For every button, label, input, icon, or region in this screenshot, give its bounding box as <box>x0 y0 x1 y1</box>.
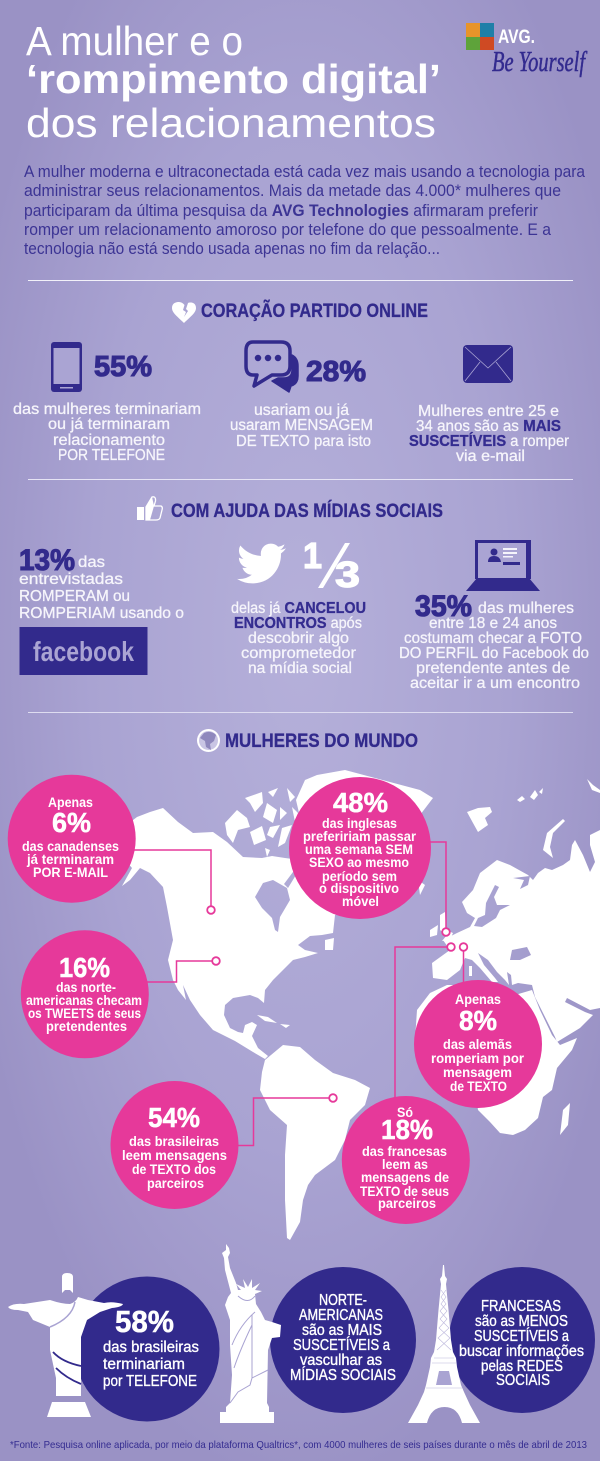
panel: france circle: pelas REDES <box>481 1358 563 1375</box>
panel: france circle: são as MENOS <box>475 1313 568 1330</box>
panel: brazil circle: 58% <box>115 1304 174 1339</box>
text: text message stat: usaram MENSAGEM <box>230 417 373 434</box>
callout: alemãs 8% <box>414 980 542 1108</box>
intro text: tecnologia não está sendo usada apenas no fim da relação... <box>24 239 440 258</box>
text: email stat: 34 anos são as MAIS <box>416 418 561 435</box>
intro text: romper um relacionamento amoroso por telefone do que pessoalmente. E a <box>24 220 551 239</box>
panel: north america circle: são as MAIS <box>302 1322 382 1339</box>
panel: com ajuda das mídias sociais <box>19 497 589 692</box>
title: A mulher e o <box>26 18 243 64</box>
callout: francesas 18%: das francesas <box>362 1144 447 1159</box>
title: dos relacionamentos <box>26 100 436 146</box>
icon: thumbs up <box>137 497 162 520</box>
callout: alemãs 8%: romperiam por <box>431 1051 525 1066</box>
text: twitter stat: descobrir algo <box>248 630 349 647</box>
callout: norte-americanas 16%: 16% <box>59 952 110 983</box>
panel: north america circle: AMERICANAS <box>299 1307 383 1324</box>
callout: inglesas 48%: uma semana SEM <box>305 842 413 857</box>
callout: inglesas 48%: SEXO ao mesmo <box>309 855 409 870</box>
panel: north america circle: MÍDIAS SOCIAIS <box>290 1367 396 1384</box>
callout: inglesas 48%: móvel <box>342 894 379 909</box>
text: facebook profile stat: aceitar ir a um encontro <box>410 675 580 692</box>
world map <box>120 770 600 1240</box>
panel: france circle: SUSCETÍVEIS a <box>474 1328 569 1345</box>
text: text message stat <box>230 402 373 450</box>
text: facebook profile stat: 35% <box>415 590 472 623</box>
callout: brasileiras 54%: de TEXTO dos <box>132 1162 216 1177</box>
text: email stat: Mulheres entre 25 e <box>418 403 559 420</box>
text: twitter stat: comprometedor <box>241 645 357 662</box>
callout: francesas 18% <box>342 1096 470 1224</box>
statue robe folds <box>230 1296 268 1403</box>
text: twitter stat: ENCONTROS após <box>234 615 362 632</box>
callout: canadenses 6%: 6% <box>52 807 91 838</box>
callout: inglesas 48%: das inglesas <box>322 816 397 831</box>
callout: canadenses 6% <box>8 775 136 903</box>
text: twitter stat: delas já CANCELOU <box>231 600 366 617</box>
facebook logo <box>20 627 148 675</box>
text: email stat: via e-mail <box>456 448 525 465</box>
callout: norte-americanas 16%: das norte- <box>56 980 116 995</box>
facebook logo: facebook <box>33 636 134 667</box>
text: twitter stat <box>231 600 366 677</box>
fraction one third: 3 <box>335 554 360 595</box>
title <box>26 18 441 146</box>
callout: inglesas 48%: o dispositivo <box>319 881 399 896</box>
panel: france circle: SOCIAIS <box>496 1372 550 1389</box>
callout: francesas 18%: 18% <box>381 1114 433 1145</box>
text: facebook stat: 13% <box>19 544 75 577</box>
callout: norte-americanas 16%: americanas checam <box>26 993 142 1008</box>
heading: MULHERES DO MUNDO <box>225 731 418 752</box>
text: email stat <box>409 403 570 465</box>
text: facebook profile stat: das mulheres <box>478 600 574 617</box>
heading: CORAÇÃO PARTIDO ONLINE <box>201 300 428 322</box>
panel: france circle: FRANCESAS <box>481 1298 561 1315</box>
icon: phone <box>51 342 82 392</box>
text: facebook stat: ROMPERAM ou <box>19 588 130 605</box>
callout: francesas 18%: TEXTO de seus <box>360 1184 449 1199</box>
text: facebook profile stat: entre 18 e 24 anos <box>429 615 557 632</box>
icon: broken heart <box>172 302 196 323</box>
text: telephone stat: POR TELEFONE <box>58 447 165 464</box>
text: telephone stat: das mulheres terminariam <box>13 401 201 418</box>
text: text message stat: DE TEXTO para isto <box>236 433 371 450</box>
panel: north america circle: NORTE- <box>319 1292 367 1309</box>
callout: canadenses 6%: POR E-MAIL <box>33 865 108 880</box>
heading: COM AJUDA DAS MÍDIAS SOCIAIS <box>171 500 443 522</box>
text: telephone stat: relacionamento <box>53 432 165 449</box>
callout: norte-americanas 16%: pretendentes <box>46 1019 127 1034</box>
text: facebook stat: ROMPERIAM usando o <box>19 605 184 622</box>
callout: alemãs 8%: das alemãs <box>443 1037 512 1052</box>
panel: north america circle: SUSCETÍVEIS a <box>293 1337 390 1354</box>
callout: canadenses 6%: das canadenses <box>22 839 119 854</box>
logo: AVG Be Yourself <box>466 23 588 78</box>
text: text message stat: usariam ou já <box>254 402 349 419</box>
callout: alemãs 8%: mensagem <box>443 1065 512 1080</box>
panel: north america circle <box>270 1267 416 1413</box>
intro text: participaram da última pesquisa da AVG Technologies afirmaram preferir <box>24 201 538 220</box>
panel: coração partido online <box>13 300 570 465</box>
callout: inglesas 48%: prefeririam passar <box>303 829 417 844</box>
callout: francesas 18%: Só <box>397 1105 413 1120</box>
text: facebook profile stat <box>399 590 589 692</box>
callout: brasileiras 54% <box>110 1081 238 1209</box>
map location dots <box>207 906 467 1102</box>
callout: francesas 18%: parceiros <box>378 1196 436 1211</box>
callout: canadenses 6%: Apenas <box>48 795 93 810</box>
callout: brasileiras 54%: das brasileiras <box>129 1134 219 1149</box>
callout: brasileiras 54%: 54% <box>148 1102 200 1133</box>
icon: globe <box>197 729 220 752</box>
map seas <box>255 868 531 960</box>
intro text: administrar seus relacionamentos. Mais da metade das 4.000* mulheres que <box>24 181 561 200</box>
icon: Statue of Liberty <box>220 1244 281 1423</box>
panel: north america circle: vasculhar as <box>300 1352 382 1369</box>
callout: francesas 18%: leem as <box>382 1157 428 1172</box>
callout: brasileiras 54%: parceiros <box>147 1176 204 1191</box>
text: twitter stat: na mídia social <box>248 660 352 677</box>
callout: alemãs 8%: 8% <box>459 1005 497 1036</box>
panel: mulheres do mundo <box>8 729 600 1240</box>
panel: brazil circle: por TELEFONE <box>103 1373 197 1390</box>
callout: inglesas 48%: período sem <box>322 869 397 884</box>
logo: AVG Be Yourself: AVG. <box>498 27 535 48</box>
title: ‘rompimento digital’ <box>26 56 441 102</box>
callout: inglesas 48%: 48% <box>333 787 388 818</box>
connector lines <box>130 842 464 1146</box>
callout: brasileiras 54%: leem mensagens <box>122 1148 227 1163</box>
callout: alemãs 8%: de TEXTO <box>450 1079 507 1094</box>
text: telephone stat <box>13 401 201 464</box>
panel: brazil circle: terminariam <box>103 1356 185 1373</box>
callout: canadenses 6%: já terminaram <box>26 852 114 867</box>
stat 28%: 28% <box>306 356 366 388</box>
Christ fold strokes <box>50 1302 81 1384</box>
fraction one third <box>303 535 360 595</box>
panel: brazil circle <box>74 1276 220 1422</box>
text: facebook profile stat: DO PERFIL do Facebook do <box>399 645 589 662</box>
panel: france circle: buscar informações <box>459 1343 584 1360</box>
icon: Christ the Redeemer <box>8 1273 123 1417</box>
text: facebook stat <box>19 544 184 622</box>
callout: norte-americanas 16%: os TWEETS de seus <box>28 1006 141 1021</box>
text: facebook stat: entrevistadas <box>19 571 123 588</box>
intro text <box>24 162 585 258</box>
icon: chat bubbles <box>246 342 298 392</box>
callout: norte-americanas 16% <box>21 930 149 1058</box>
text: facebook profile stat: costumam checar a FOTO <box>404 630 582 647</box>
panel: france circle <box>449 1267 595 1413</box>
callout: francesas 18%: mensagens de <box>361 1170 449 1185</box>
callout: inglesas 48% <box>289 777 431 919</box>
icon: laptop with profile <box>466 540 540 591</box>
text: telephone stat: ou já terminaram <box>48 416 170 433</box>
callout: alemãs 8%: Apenas <box>455 992 501 1007</box>
icon: Eiffel Tower <box>408 1265 480 1423</box>
stat 55%: 55% <box>94 351 152 383</box>
icon: envelope <box>463 345 513 383</box>
icon: twitter bird <box>237 544 286 583</box>
text: facebook profile stat: pretendente antes de <box>416 660 570 677</box>
text: facebook stat: das <box>78 554 105 571</box>
text: email stat: SUSCETÍVEIS a romper <box>409 431 570 450</box>
fraction one third: 1 <box>303 535 322 576</box>
panel: brazil circle: das brasileiras <box>103 1339 199 1356</box>
